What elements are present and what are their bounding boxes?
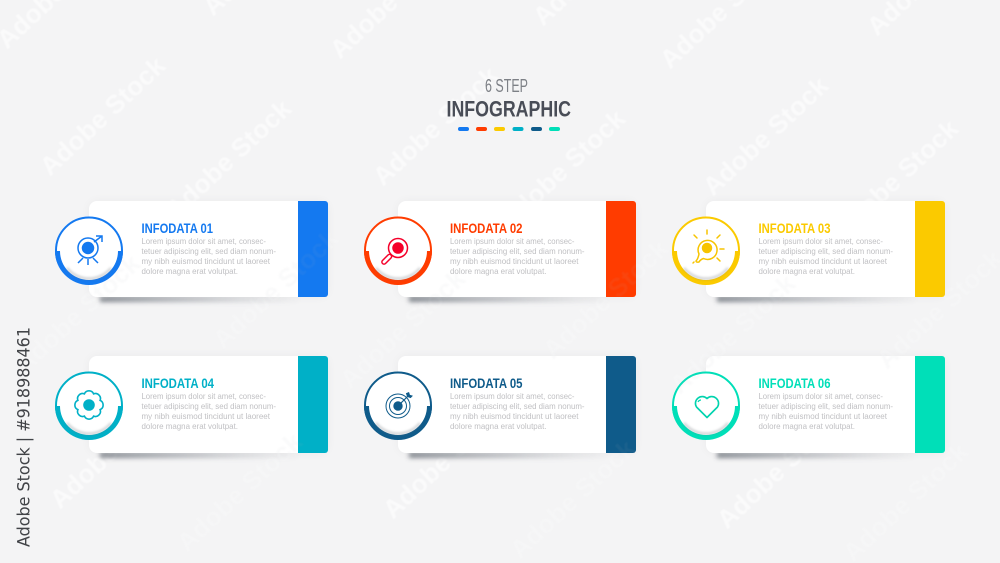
panel: infodata 05 (364, 356, 636, 458)
watermark over cards: Adobe Stock (664, 268, 801, 399)
text 05: dolore magna erat volutpat. (450, 421, 546, 431)
text 03: my nibh euismod tincidunt ut laoreet (758, 256, 888, 266)
icon: gear flower (75, 391, 103, 419)
watermark over cards (9, 223, 1000, 563)
badge 05 (364, 372, 432, 440)
watermark pattern: Adobe Stock (504, 433, 641, 563)
watermark pattern: Adobe Stock (171, 426, 308, 557)
watermark pattern: Adobe Stock (9, 248, 146, 379)
badge 02 (364, 218, 432, 285)
text 05: tetuer adipiscing elit, sed diam nonum- (450, 401, 585, 411)
icon: magnifier (382, 238, 408, 264)
text 04: tetuer adipiscing elit, sed diam nonum- (142, 401, 276, 411)
badge 04 (55, 372, 123, 440)
text 05: my nibh euismod tincidunt ut laoreet (450, 411, 579, 421)
panel: infodata 01 (55, 201, 328, 302)
watermark pattern: Adobe Stock (711, 403, 848, 534)
watermark pattern: Adobe Stock (34, 50, 171, 181)
text 02 (450, 236, 585, 276)
text 03: tetuer adipiscing elit, sed diam nonum- (758, 246, 893, 256)
watermark pattern: Adobe Stock (664, 268, 801, 399)
icon: bullseye with dart (386, 393, 412, 418)
badge 06 (672, 372, 740, 440)
text 01: Lorem ipsum dolor sit amet, consec- (142, 236, 266, 246)
heading 05: INFODATA 05 (450, 375, 523, 391)
text 03 (758, 236, 893, 276)
heading 03: INFODATA 03 (758, 220, 831, 236)
watermark pattern: Adobe Stock (827, 113, 964, 244)
text 01: dolore magna erat volutpat. (142, 266, 238, 276)
watermark pattern: Adobe Stock (207, 223, 344, 354)
watermark over cards: Adobe Stock (9, 248, 146, 379)
text 04: dolore magna erat volutpat. (142, 421, 238, 431)
panel: infodata 04 (55, 356, 328, 458)
text 05: Lorem ipsum dolor sit amet, consec- (450, 391, 575, 401)
icon: light bulb (693, 230, 724, 263)
text 01: my nibh euismod tincidunt ut laoreet (142, 256, 271, 266)
text 02: my nibh euismod tincidunt ut laoreet (450, 256, 579, 266)
watermark pattern: Adobe Stock (160, 93, 297, 224)
icon: heart (695, 397, 719, 418)
watermark pattern: Adobe Stock (334, 263, 471, 394)
watermark pattern: Adobe Stock (494, 103, 631, 234)
heading 06: INFODATA 06 (758, 375, 831, 391)
text 03: Lorem ipsum dolor sit amet, consec- (758, 236, 883, 246)
text 06: my nibh euismod tincidunt ut laoreet (758, 411, 888, 421)
heading 02: INFODATA 02 (450, 220, 523, 236)
watermark pattern: Adobe Stock (44, 383, 181, 514)
text 03: dolore magna erat volutpat. (758, 266, 855, 276)
title (446, 76, 571, 122)
text 01 (142, 236, 276, 276)
watermark pattern: Adobe Stock (377, 393, 514, 524)
heading: infographic: INFOGRAPHIC (446, 97, 571, 122)
icon: target with arrow (78, 236, 102, 265)
panel: infodata 03 (672, 201, 945, 302)
colour dashes (458, 127, 560, 131)
watermark over cards: Adobe Stock (504, 433, 641, 563)
watermark over cards: Adobe Stock (207, 223, 344, 354)
text 06: Lorem ipsum dolor sit amet, consec- (758, 391, 883, 401)
watermark over cards: Adobe Stock (171, 426, 308, 557)
subtitle: 6 step: 6 STEP (485, 76, 528, 96)
watermark pattern: Adobe Stock (697, 70, 834, 201)
text 06 (758, 391, 893, 431)
watermark pattern: Adobe Stock (367, 60, 504, 191)
heading 01: INFODATA 01 (142, 220, 213, 236)
text 02: dolore magna erat volutpat. (450, 266, 546, 276)
text 02: tetuer adipiscing elit, sed diam nonum- (450, 246, 585, 256)
stock id label: Adobe Stock | #918988461 (14, 327, 34, 547)
text 04 (142, 391, 276, 431)
badge 01 (55, 218, 123, 285)
heading 04: INFODATA 04 (142, 375, 214, 391)
text 02: Lorem ipsum dolor sit amet, consec- (450, 236, 575, 246)
watermark pattern: Adobe Stock (537, 233, 674, 364)
text 06: tetuer adipiscing elit, sed diam nonum- (758, 401, 893, 411)
panel: infodata 06 (672, 356, 945, 458)
text 01: tetuer adipiscing elit, sed diam nonum- (142, 246, 276, 256)
panel: infodata 02 (364, 201, 636, 302)
badge 03 (672, 218, 740, 285)
watermark over cards: Adobe Stock (334, 263, 471, 394)
text 06: dolore magna erat volutpat. (758, 421, 855, 431)
text 05 (450, 391, 585, 431)
text 04: Lorem ipsum dolor sit amet, consec- (142, 391, 266, 401)
watermark over cards: Adobe Stock (537, 233, 674, 364)
text 04: my nibh euismod tincidunt ut laoreet (142, 411, 271, 421)
